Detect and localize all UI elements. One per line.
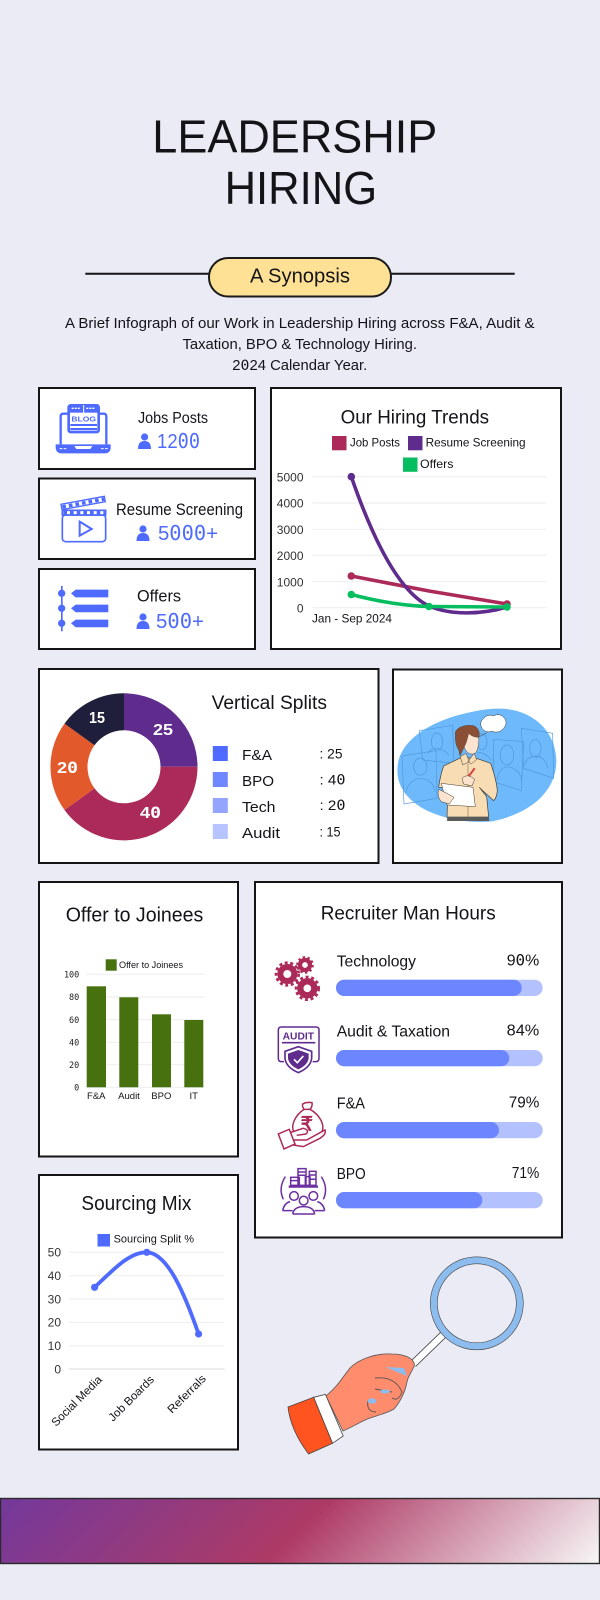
icon: blog laptop: BLOG: [71, 415, 96, 424]
panel: vertical splits: [39, 669, 378, 863]
line chart: sourcing split: Job Boards: [107, 1374, 157, 1424]
line chart: sourcing split: 30: [48, 1292, 61, 1306]
number: 1200: 1200: [157, 429, 200, 453]
donut chart: 20: [57, 758, 78, 777]
panel: recruiter man hours: [255, 882, 562, 1238]
label: f and a: F&A: [337, 1096, 365, 1113]
line chart: sourcing split: 50: [48, 1246, 61, 1260]
illustration: hand with magnifying glass: [288, 1260, 520, 1454]
line chart: sourcing split: [48, 1246, 225, 1429]
intro text: [65, 316, 535, 374]
legend: verticals: : 40: [320, 772, 346, 788]
line chart: hiring trends: 0: [297, 601, 304, 615]
legend: verticals: Audit: [242, 825, 281, 842]
value: 90%: 90%: [507, 951, 539, 970]
icon: money bag in hand: ₹: [301, 1115, 313, 1136]
legend: verticals: [213, 746, 346, 842]
icon: gears: [276, 957, 319, 1000]
legend: verticals: : 15: [320, 824, 341, 840]
line chart: hiring trends: 1000: [277, 575, 304, 589]
bar chart: offer to joinees: 100: [64, 970, 79, 980]
icon: clapperboard: [61, 496, 106, 542]
value: 84%: 84%: [507, 1023, 539, 1040]
chart legend: Resume Screening: [426, 436, 526, 450]
icon: person: [136, 525, 150, 541]
panel: sourcing mix: [39, 1175, 238, 1450]
title: LEADERSHIP: [152, 110, 437, 162]
donut chart: 25: [153, 722, 173, 739]
number: 5000+: 5000+: [158, 521, 218, 545]
line chart: sourcing split: 20: [48, 1316, 61, 1330]
line chart: sourcing split: Referrals: [166, 1373, 209, 1416]
icon: money bag in hand: [278, 1102, 325, 1149]
row: technology: [276, 951, 543, 1000]
label: bpo: BPO: [337, 1166, 366, 1183]
bar chart: offer to joinees: BPO: [151, 1091, 171, 1102]
label: jobs posts: Jobs Posts: [138, 410, 208, 427]
icon: person: [136, 613, 150, 629]
legend: verticals: BPO: [242, 773, 274, 790]
panel: jobs posts: [39, 388, 255, 469]
icon: audit shield: [278, 1027, 319, 1073]
donut chart: 15: [89, 710, 105, 727]
donut chart: 40: [140, 803, 161, 822]
label: audit and taxation: Audit & Taxation: [337, 1024, 450, 1041]
chart legend: Offers: [420, 457, 454, 471]
label: offers: Offers: [137, 588, 181, 606]
synopsis divider and pill: A Synopsis: [250, 266, 350, 288]
intro text: A Brief Infograph of our Work in Leadership Hiring across F&A, Audit &: [65, 316, 535, 332]
legend: verticals: Tech: [242, 799, 276, 816]
heading: vertical splits: Vertical Splits: [212, 693, 327, 714]
heading: sourcing mix: Sourcing Mix: [81, 1193, 191, 1215]
illustration: recruiter reviewing candidates: [397, 709, 556, 822]
heading: offer to joinees: Offer to Joinees: [66, 905, 203, 927]
panel: offer to joinees: [39, 882, 238, 1156]
progress bar: 71%: [336, 1192, 543, 1208]
icon: person: [138, 433, 151, 449]
progress bar: 79%: [336, 1122, 543, 1138]
bar chart: offer to joinees: Audit: [118, 1091, 140, 1102]
intro text: 2024 Calendar Year.: [232, 358, 367, 374]
icon: buildings and people: [281, 1169, 326, 1214]
panel: resume screening: [39, 478, 255, 559]
value: 71%: 71%: [512, 1165, 539, 1182]
bar chart: offer to joinees: F&A: [87, 1091, 106, 1102]
row: audit and taxation: [278, 1023, 543, 1073]
line chart: sourcing split: 0: [54, 1362, 61, 1376]
title: HIRING: [225, 162, 377, 214]
title: [152, 110, 437, 214]
line chart: hiring trends: 4000: [277, 497, 304, 511]
line chart: sourcing split: Social Media: [50, 1374, 105, 1429]
row: finance and accounts: [278, 1095, 543, 1149]
bar chart: offer to joinees: IT: [189, 1091, 198, 1102]
chart legend: Sourcing Split %: [114, 1234, 194, 1246]
label: technology: Technology: [337, 954, 416, 971]
bar chart: offer to joinees: [64, 970, 204, 1102]
panel: our hiring trends: [271, 388, 561, 649]
bar chart: offer to joinees: 20: [69, 1061, 79, 1071]
line chart: hiring trends: 5000: [277, 470, 304, 484]
synopsis divider and pill: [85, 258, 515, 296]
icon: blog laptop: [56, 405, 111, 453]
bar chart: offer to joinees: 0: [74, 1084, 79, 1094]
heading: our hiring trends: Our Hiring Trends: [341, 406, 489, 428]
bar chart: offer to joinees: 40: [69, 1038, 79, 1048]
footer gradient band: [0, 1498, 600, 1564]
legend: verticals: F&A: [242, 747, 272, 764]
icon: list timeline: [58, 586, 108, 631]
line chart: hiring trends: 2000: [277, 549, 304, 563]
legend: verticals: : 20: [320, 797, 346, 814]
intro text: Taxation, BPO & Technology Hiring.: [182, 337, 417, 353]
line chart: hiring trends: Jan - Sep 2024: [312, 611, 392, 625]
line chart: hiring trends: [277, 470, 546, 625]
chart legend: Job Posts: [350, 436, 400, 450]
bar chart: offer to joinees: 80: [69, 993, 79, 1003]
progress bar: 84%: [336, 1050, 543, 1066]
number: 500+: 500+: [156, 609, 204, 633]
legend: verticals: : 25: [320, 746, 343, 762]
chart legend: [332, 436, 526, 472]
label: resume screening: Resume Screening: [116, 501, 243, 519]
value: 79%: 79%: [509, 1095, 539, 1112]
panel: offers: [39, 569, 255, 649]
panel: illustration: [393, 670, 562, 863]
chart legend: Offer to Joinees: [119, 960, 183, 971]
heading: recruiter man hours: Recruiter Man Hours: [321, 902, 496, 924]
icon: audit shield: AUDIT: [283, 1031, 314, 1042]
line chart: sourcing split: 10: [48, 1339, 61, 1353]
bar chart: offer to joinees: 60: [69, 1016, 79, 1026]
donut chart: [50, 693, 198, 840]
progress bar: 90%: [336, 980, 543, 996]
line chart: sourcing split: 40: [48, 1269, 61, 1283]
row: bpo: [281, 1165, 543, 1214]
line chart: hiring trends: 3000: [277, 523, 304, 537]
